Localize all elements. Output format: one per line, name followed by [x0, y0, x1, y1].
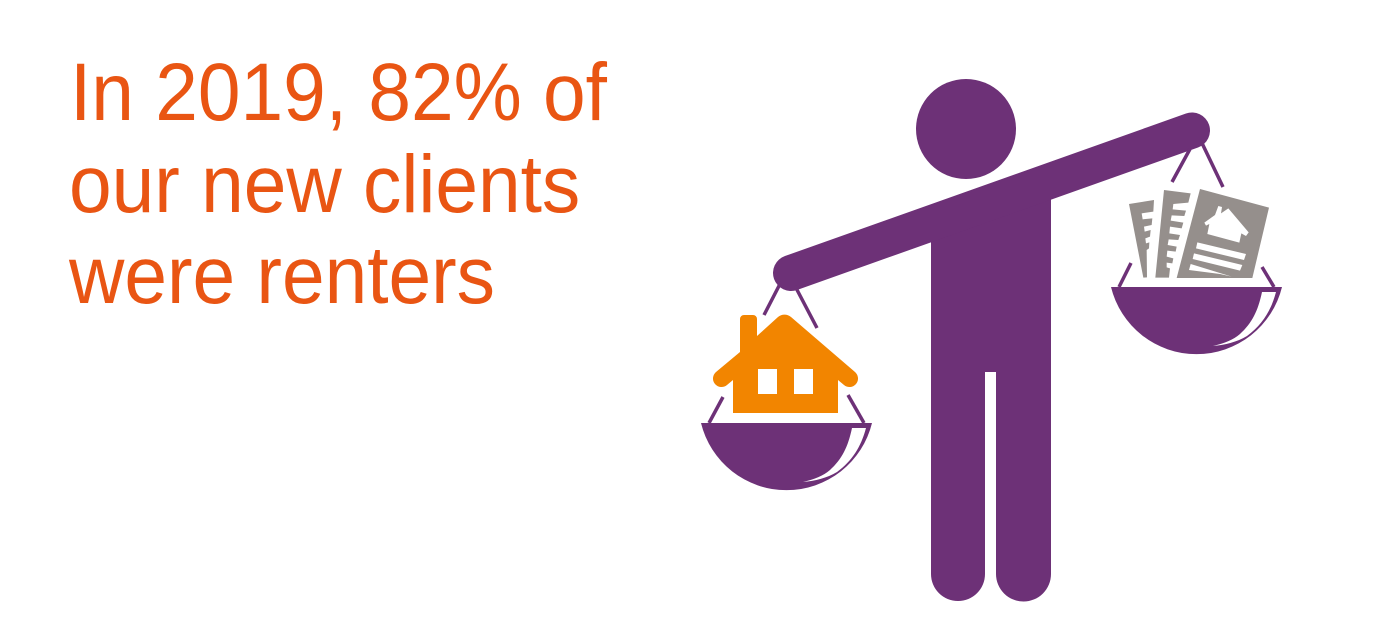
- document middle: [1155, 190, 1191, 278]
- right pan: [1111, 287, 1282, 354]
- title: our new clients: [69, 138, 580, 230]
- title: In 2019, 82% of: [70, 46, 608, 138]
- title: were renters: [68, 229, 495, 321]
- title: [68, 46, 608, 321]
- right pan highlight: [1213, 292, 1276, 346]
- icon: right scale with documents: [1111, 141, 1282, 354]
- icon: house: [713, 315, 858, 413]
- document right with house: [1177, 189, 1269, 278]
- left scale strings: [709, 282, 864, 423]
- right scale strings: [1119, 141, 1274, 287]
- icon: documents: [1129, 189, 1269, 278]
- left pan: [701, 423, 872, 490]
- document left: [1129, 200, 1154, 278]
- icon: left scale with house: [701, 282, 872, 490]
- figure balancing scales: [701, 79, 1282, 602]
- icon: person: [791, 79, 1192, 602]
- left pan highlight: [803, 428, 866, 482]
